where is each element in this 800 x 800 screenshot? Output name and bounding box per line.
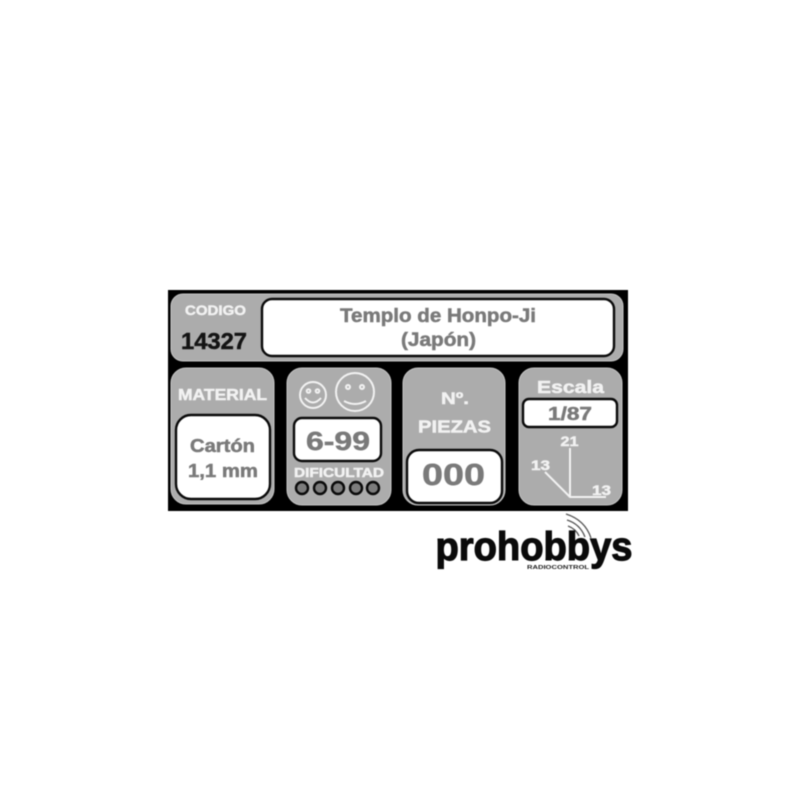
dimensions diagram bbox=[531, 433, 611, 498]
dimensions diagram: 21 bbox=[560, 433, 579, 449]
title box bbox=[262, 299, 614, 356]
dimensions diagram: 13 bbox=[531, 457, 550, 473]
material name: Cartón bbox=[190, 436, 255, 456]
panel: material bbox=[171, 368, 274, 504]
pieces box bbox=[407, 450, 502, 503]
pieces heading line two: PIEZAS bbox=[418, 416, 491, 436]
panel: pieces bbox=[403, 368, 505, 505]
age box bbox=[294, 418, 381, 461]
icon: small smiley bbox=[300, 382, 326, 408]
logo wordmark: prohobbys bbox=[436, 525, 632, 569]
subtitle text: (Japón) bbox=[401, 330, 476, 351]
pieces heading: Nº. bbox=[441, 389, 469, 408]
logo tagline: RADIOCONTROL bbox=[527, 565, 590, 571]
difficulty dots bbox=[296, 482, 379, 494]
scale box bbox=[523, 399, 617, 427]
panel: difficulty bbox=[287, 368, 391, 505]
age range: 6-99 bbox=[306, 426, 370, 456]
material box bbox=[176, 415, 270, 499]
difficulty heading: DIFICULTAD bbox=[294, 466, 384, 480]
panel: title bbox=[171, 294, 623, 361]
dimensions diagram: 13 bbox=[592, 482, 611, 498]
material thickness: 1,1 mm bbox=[188, 461, 258, 481]
title text: Templo de Honpo-Ji bbox=[340, 306, 536, 327]
label card background bbox=[168, 290, 628, 511]
brand logo bbox=[436, 514, 632, 571]
pieces count: 000 bbox=[422, 457, 485, 492]
code heading: CODIGO bbox=[185, 302, 246, 318]
code number: 14327 bbox=[181, 328, 247, 354]
panel: scale bbox=[519, 368, 622, 505]
scale value: 1/87 bbox=[548, 404, 592, 424]
icon: large smiley bbox=[336, 373, 374, 411]
icon: signal arcs bbox=[566, 514, 591, 538]
scale heading: Escala bbox=[537, 377, 604, 397]
material heading: MATERIAL bbox=[178, 387, 267, 404]
